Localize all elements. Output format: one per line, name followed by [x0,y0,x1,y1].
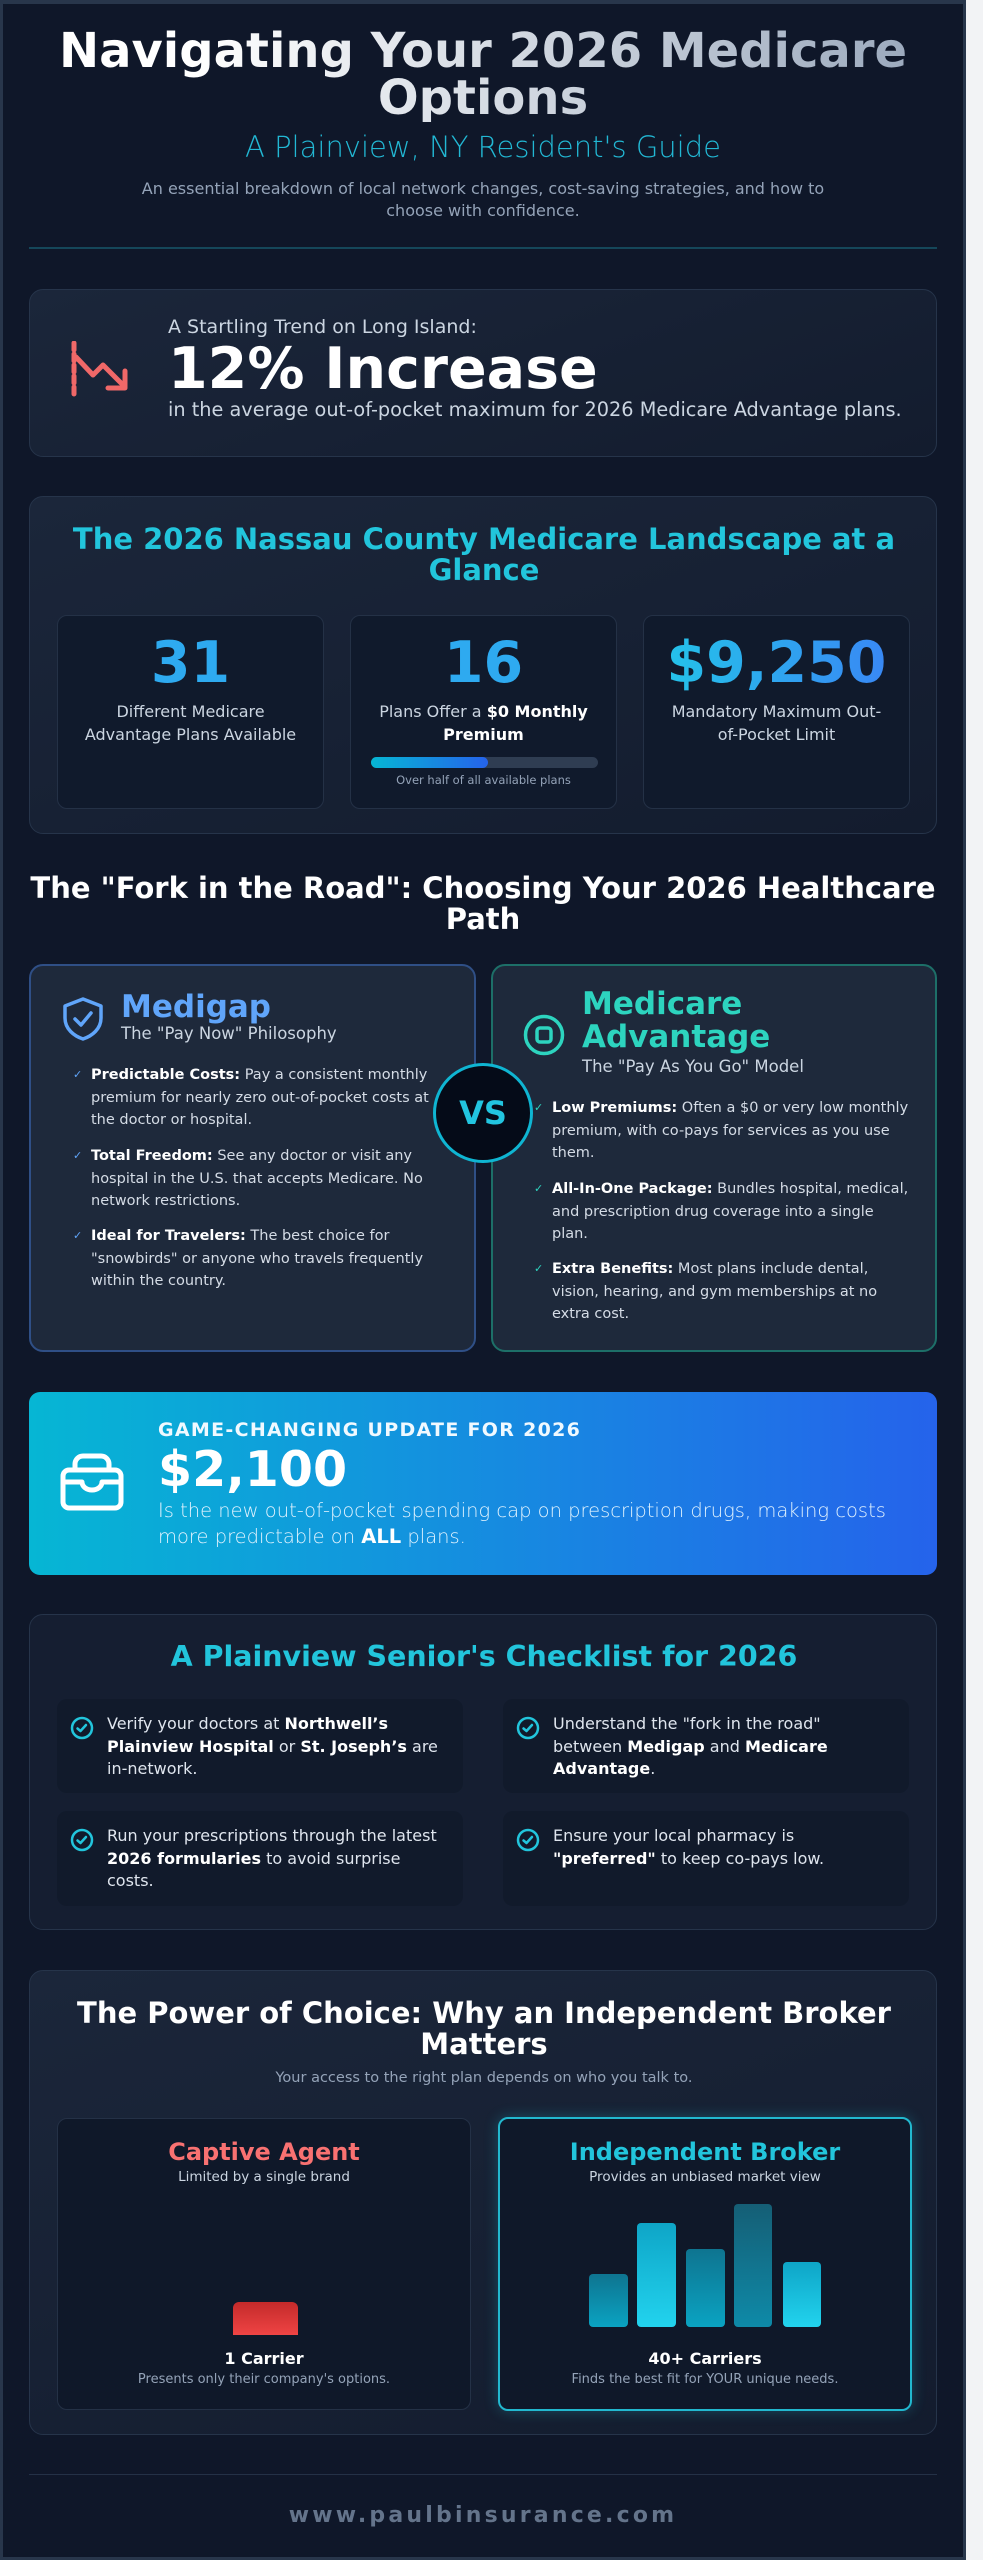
heading: A Plainview Senior's Checklist for 2026 [171,1640,797,1673]
panel: medicare advantage [491,964,937,1352]
stat card: 31 [57,615,324,809]
icon: trend [72,341,128,396]
card: independent broker: Independent Broker [570,2138,840,2166]
description: choose with confidence. [386,201,580,220]
panel: landscape [29,496,937,834]
medigap title: Medigap [121,989,271,1025]
card: captive agent: Limited by a single brand [178,2169,350,2185]
card: independent broker: 40+ Carriers [648,2349,762,2368]
banner text: Is the new out-of-pocket spending cap on prescription drugs, making costs more predictable on ALL plans. [158,1499,886,1548]
heading: Glance [429,553,539,587]
MA title: Medicare [582,986,742,1022]
panel: medigap [29,964,476,1352]
description [142,179,824,220]
panel: medigap: Ideal for Travelers: The best choice for "snowbirds" or anyone who travels frequently within the country. [91,1228,423,1289]
text: trend: A Startling Trend on Long Island: [168,316,477,338]
icon: VS badge: VS [459,1094,507,1132]
bullets: medigap [73,1067,429,1289]
MA title [582,986,770,1055]
panel: medicare advantage: ✓ [534,1101,543,1114]
footer: website: www.paulbinsurance.com [289,2503,677,2528]
panel: medigap: Total Freedom: See any doctor or visit any hospital in the U.S. that accepts Medicare. No network restrictions. [91,1148,423,1209]
title: Options [378,70,588,126]
text: trend [168,316,902,421]
card: independent broker: Provides an unbiased market view [589,2169,821,2185]
bullets: MA [534,1100,908,1322]
heading: The 2026 Nassau County Medicare Landscape at a [73,522,895,556]
panel: medicare advantage: Extra Benefits: Most plans include dental, vision, hearing, and gym memberships at no extra cost. [552,1261,877,1322]
heading [77,1996,891,2061]
stat card: 31: Different Medicare [116,702,265,721]
stat card: 9250 [643,615,910,809]
item 1: Verify your doctors at Northwell’s Plainview Hospital or St. Joseph’s are in-network. [107,1714,438,1778]
panel: medicare advantage: ✓ [534,1182,543,1195]
panel: medicare advantage: ✓ [534,1262,543,1275]
card: captive agent: 1 Carrier [224,2349,304,2368]
stat card: 9250: Mandatory Maximum Out- [672,702,881,721]
panel: medicare advantage: Low Premiums: Often a $0 or very low monthly premium, with co-pays for services as you use them. [552,1100,908,1161]
panel: medigap: The "Pay Now" Philosophy [121,1024,337,1043]
title [0,28,966,122]
panel: medigap: ✓ [73,1068,82,1081]
panel: medigap: ✓ [73,1149,82,1162]
heading [73,522,895,587]
MA title: Advantage [582,1019,770,1055]
heading: fork in the road: The "Fork in the Road": Choosing Your 2026 Healthcare [30,871,936,905]
stat card: 16: Over half of all available plans [396,773,571,787]
item 2 [503,1699,909,1793]
heading: fork in the road: Path [446,902,520,936]
icon: VS badge [433,1063,533,1163]
card: captive agent [57,2118,471,2410]
stat card: 9250: of-Pocket Limit [718,725,835,744]
card: independent broker [498,2117,912,2411]
stat card: 16: Plans Offer a $0 Monthly [379,702,588,721]
banner text: $2,100 [158,1441,347,1498]
item 1 [57,1699,463,1793]
stat card: 16 [350,615,617,809]
stat card: 16: Premium [443,725,524,744]
bar: single carrier [233,2302,298,2335]
banner text: GAME-CHANGING UPDATE FOR 2026 [158,1419,581,1441]
progress bar [371,757,598,768]
description: An essential breakdown of local network changes, cost-saving strategies, and how to [142,179,824,198]
panel: medigap: Predictable Costs: Pay a consistent monthly premium for nearly zero out-of-pocket costs at the doctor or hospital. [91,1067,429,1128]
heading: Matters [420,2027,548,2061]
panel: broker: Your access to the right plan depends on who you talk to. [276,2070,692,2086]
heading: fork in the road [30,871,936,936]
stat card: 31: 31 [151,630,230,696]
text: trend: in the average out-of-pocket maximum for 2026 Medicare Advantage plans. [168,398,902,421]
item 4: Ensure your local pharmacy is "preferred" to keep co-pays low. [553,1826,824,1868]
icon: bag [60,1454,124,1510]
subtitle: A Plainview, NY Resident's Guide [245,130,721,164]
panel: broker [29,1970,937,2435]
icon: shield [63,997,103,1041]
card: captive agent: Captive Agent [168,2138,360,2166]
item 3: Run your prescriptions through the latest 2026 formularies to avoid surprise costs. [107,1826,437,1890]
banner text [158,1419,886,1548]
text: trend: 12% Increase [168,336,598,402]
panel: medicare advantage: All-In-One Package: Bundles hospital, medical, and prescription drug coverage into a single plan. [552,1181,908,1242]
stat card: 9250: $9,250 [667,630,886,696]
card: independent broker: Finds the best fit for YOUR unique needs. [572,2372,838,2387]
item 4 [503,1811,909,1906]
heading: The Power of Choice: Why an Independent Broker [77,1996,891,2030]
bar chart: carriers [589,2204,821,2327]
panel: medigap: ✓ [73,1229,82,1242]
stat card: 16: 16 [444,630,523,696]
item 2: Understand the "fork in the road" between Medigap and Medicare Advantage. [553,1714,828,1778]
title: Navigating Your 2026 Medicare [59,23,907,79]
card: captive agent: Presents only their company's options. [138,2372,390,2387]
panel: startling trend [29,289,937,457]
icon: circle square [524,1014,564,1056]
stat card: 31: Advantage Plans Available [85,725,296,744]
banner: drug cap [29,1392,937,1575]
item 3 [57,1811,463,1906]
panel: medicare advantage: The "Pay As You Go" Model [582,1057,804,1076]
panel: checklist [29,1614,937,1930]
